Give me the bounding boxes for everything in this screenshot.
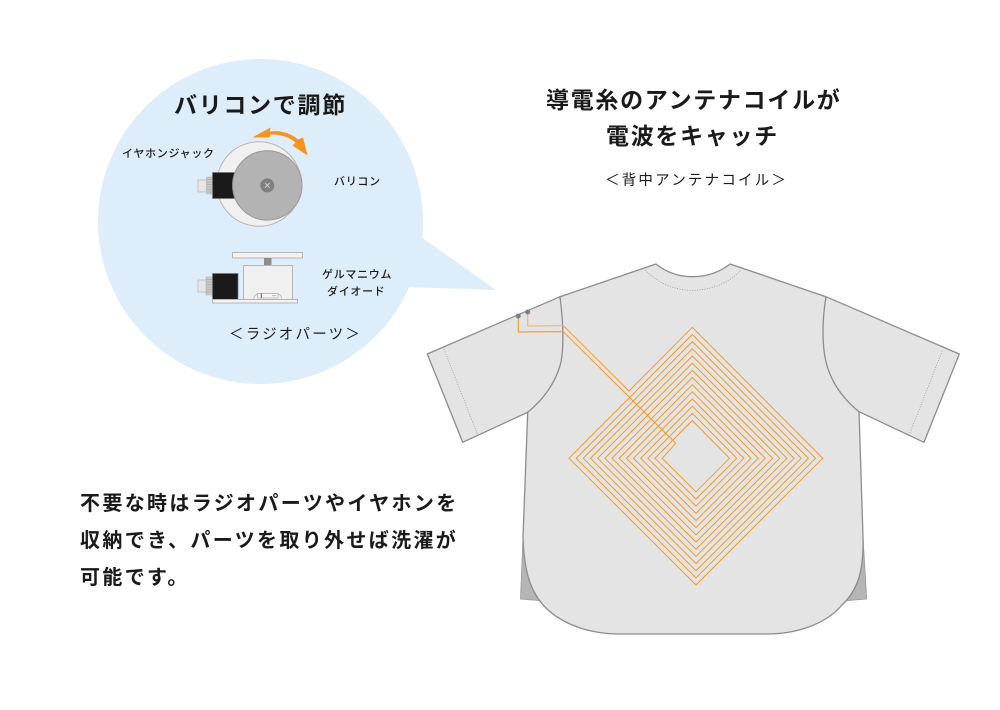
shirt body and sleeves <box>427 264 959 634</box>
heading second line: 電波をキャッチ <box>606 123 779 149</box>
inner back hem gussets <box>520 537 867 601</box>
antenna coil spiral <box>563 326 823 585</box>
sleeve seams <box>528 297 859 412</box>
illustration: t-shirt back with antenna coil <box>427 264 959 634</box>
icon: rotation arrow <box>252 128 308 156</box>
caption: radio parts: ＜ラジオパーツ＞ <box>229 326 362 343</box>
text block: storage and washing note: 可能です。 <box>80 566 190 589</box>
bubble heading: バリコンで調節 <box>174 92 347 118</box>
caption: back antenna coil: ＜背中アンテナコイル＞ <box>605 172 788 189</box>
text block: storage and washing note: 収納でき、パーツを取り外せば洗濯が <box>80 528 458 552</box>
coil lead wires to shoulder <box>516 310 563 332</box>
label: diode second line: ダイオード <box>327 284 386 298</box>
text block: storage and washing note: 不要な時はラジオパーツやイヤホンを <box>80 492 459 515</box>
panel: speech bubble with radio parts <box>98 59 496 384</box>
icon: radio side view <box>198 252 302 303</box>
stitching lines <box>444 270 942 434</box>
icon: radio top view <box>198 142 302 226</box>
label: germanium diode: ゲルマニウム <box>322 268 392 281</box>
label: earphone jack: イヤホンジャック <box>122 147 215 160</box>
heading: conductive thread antenna coil: 導電糸のアンテナコイルが <box>546 87 841 113</box>
text block: storage and washing note <box>80 492 459 589</box>
bubble shape <box>98 59 496 384</box>
label: variable capacitor: バリコン <box>334 175 381 188</box>
